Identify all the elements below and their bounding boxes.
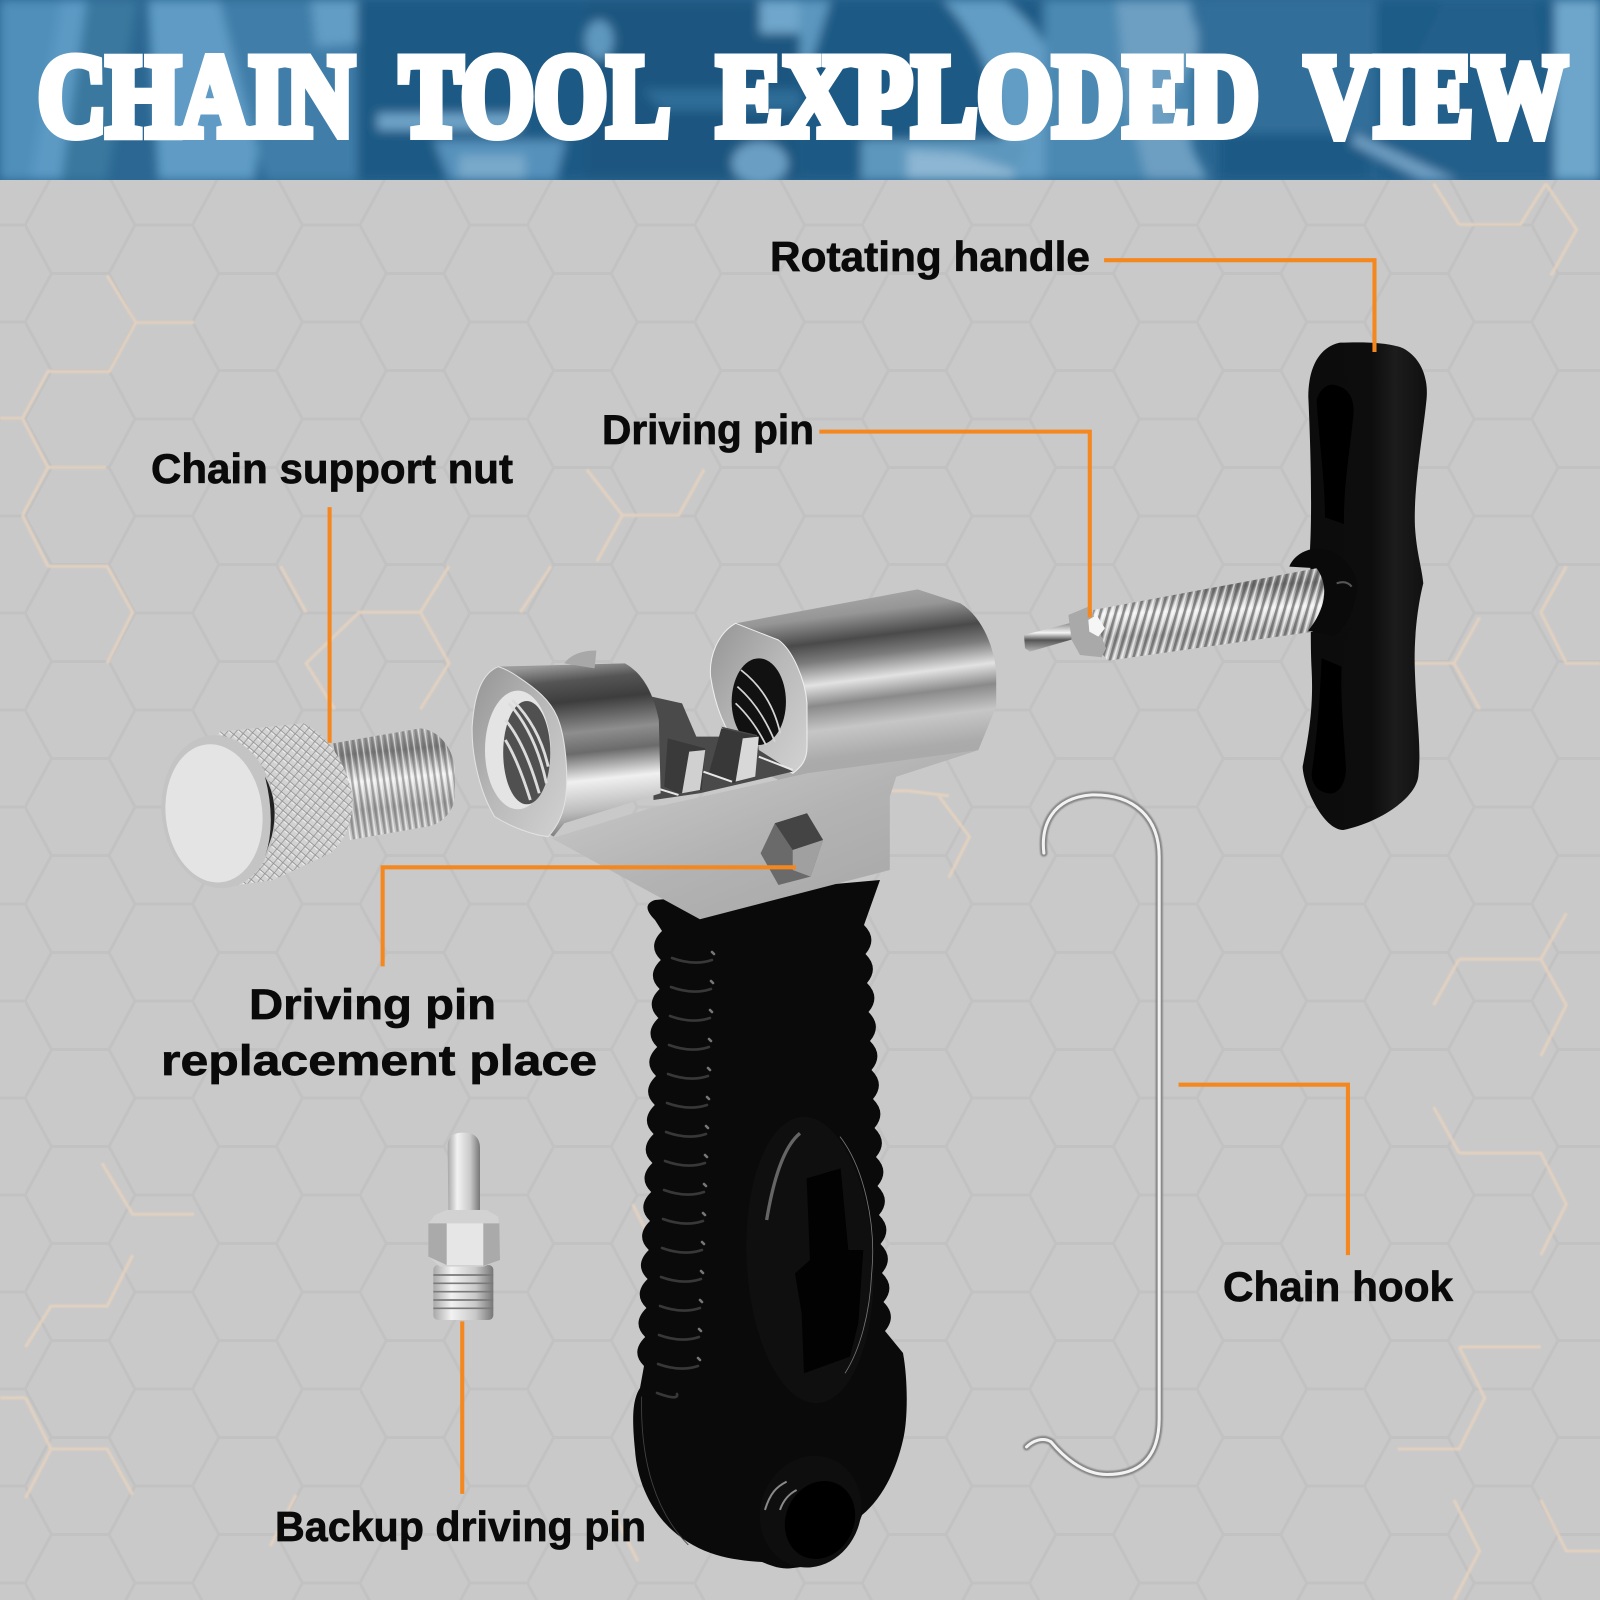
grip oval recess: [739, 1114, 881, 1406]
label: Driving pin replacement place: [161, 981, 597, 1085]
leader lines: [330, 260, 1374, 1494]
label: Driving pin replacement place: Driving pin: [249, 981, 496, 1029]
threaded shaft: [1093, 568, 1329, 661]
label: Backup driving pin: Backup driving pin: [275, 1503, 646, 1550]
title: EXPLODED: [717, 32, 1259, 161]
left face with threaded hole: [472, 667, 567, 837]
label: Driving pin: Driving pin: [602, 406, 814, 453]
threaded stud: [333, 728, 455, 840]
part: chain tool grip: [633, 880, 907, 1582]
right face with threaded hole: [710, 623, 807, 773]
T-handle: [1303, 342, 1427, 830]
hex socket: [761, 813, 823, 885]
header banner with blue duotone machinery photo: [0, 0, 1600, 180]
grip ribs: [657, 952, 714, 1397]
grip end socket: [642, 1397, 877, 1582]
right cylinder: [736, 589, 996, 793]
part: backup driving pin: [428, 1133, 500, 1320]
jaw teeth: [652, 697, 793, 800]
threads: [433, 1265, 493, 1320]
hex nut: [428, 1210, 500, 1267]
left cylinder: [493, 663, 661, 837]
title: CHAIN: [38, 32, 354, 161]
knurled head: [154, 723, 353, 894]
pin shaft: [448, 1133, 480, 1212]
part: driving pin screw: [1024, 342, 1427, 830]
plate and stem: [552, 750, 978, 919]
pin tip: [1024, 623, 1082, 652]
label: Chain hook: Chain hook: [1223, 1263, 1454, 1310]
black collar: [1289, 548, 1357, 636]
label: Driving pin replacement place: replacement place: [161, 1037, 597, 1085]
part: chain tool metal head: [472, 589, 996, 919]
part: chain hook: [1027, 795, 1159, 1474]
part: chain support nut: [154, 723, 455, 894]
title: TOOL: [400, 32, 670, 161]
hex collar: [1068, 606, 1106, 657]
title: [38, 32, 1567, 161]
label: Rotating handle: Rotating handle: [770, 233, 1090, 280]
label: Chain support nut: Chain support nut: [151, 445, 513, 492]
